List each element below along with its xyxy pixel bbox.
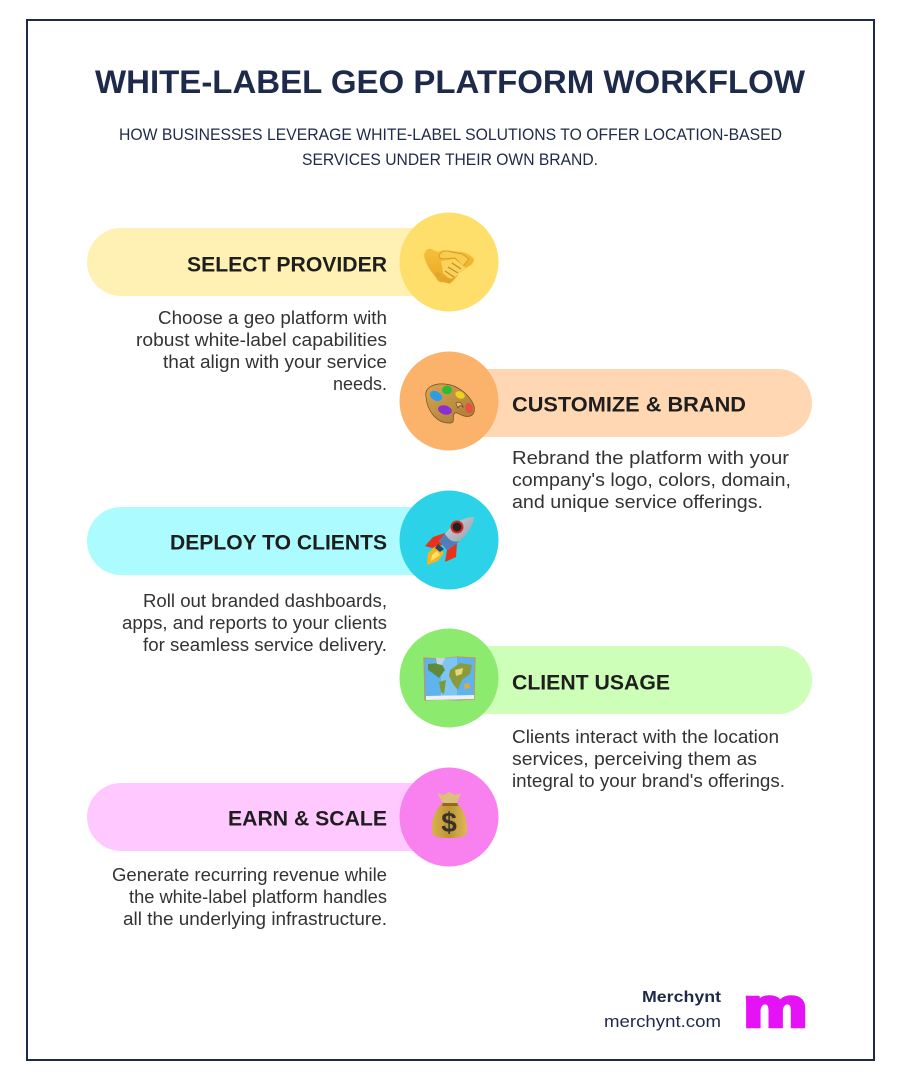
- icon: world map: [424, 657, 475, 700]
- text: earn and scale: [112, 864, 387, 929]
- logo: m: [743, 976, 807, 1038]
- panel: select provider: [87, 212, 498, 394]
- text: earn and scale: all the underlying infrastructure.: [123, 908, 387, 929]
- panel: earn and scale: [87, 768, 498, 929]
- footer: website: merchynt.com: [604, 1013, 721, 1031]
- text: select provider: robust white-label capabilities: [136, 329, 387, 350]
- dollar sign: $: [441, 807, 457, 838]
- text: earn and scale: the white-label platform handles: [129, 886, 387, 907]
- text: customize and brand: and unique service offerings.: [512, 491, 763, 512]
- text: select provider: [136, 307, 387, 394]
- text: select provider: that align with your service: [163, 351, 387, 372]
- circle: select provider: [400, 212, 498, 312]
- text: select provider: needs.: [333, 373, 387, 394]
- panel: customize and brand: [400, 352, 812, 512]
- panel: client usage: [400, 628, 812, 791]
- icon: palette: [426, 384, 474, 423]
- text: client usage: Clients interact with the location: [512, 726, 779, 747]
- text: customize and brand: Rebrand the platform with your: [512, 447, 789, 468]
- heading: client usage: CLIENT USAGE: [512, 671, 670, 695]
- heading: customize and brand: CUSTOMIZE & BRAND: [512, 393, 746, 417]
- subtitle: [119, 126, 782, 169]
- pill: select provider: [87, 228, 467, 296]
- text: earn and scale: Generate recurring revenue while: [112, 864, 387, 885]
- icon: rocket: [425, 517, 474, 565]
- icon: handshake: [424, 249, 474, 284]
- text: deploy to clients: apps, and reports to your clients: [122, 612, 387, 633]
- text: deploy to clients: Roll out branded dashboards,: [143, 590, 387, 611]
- circle: deploy to clients: [400, 490, 498, 590]
- text: customize and brand: [512, 447, 791, 512]
- circle: client usage: [400, 628, 498, 728]
- heading: deploy to clients: DEPLOY TO CLIENTS: [170, 531, 387, 555]
- footer: brand name: Merchynt: [642, 989, 721, 1006]
- subtitle: SERVICES UNDER THEIR OWN BRAND.: [302, 151, 598, 169]
- heading: earn and scale: EARN & SCALE: [228, 807, 387, 831]
- pill: customize and brand: [432, 369, 812, 437]
- text: deploy to clients: [122, 590, 387, 655]
- text: client usage: services, perceiving them as: [512, 748, 757, 769]
- text: select provider: Choose a geo platform with: [158, 307, 387, 328]
- pill: earn and scale: [87, 783, 467, 851]
- subtitle: HOW BUSINESSES LEVERAGE WHITE-LABEL SOLUTIONS TO OFFER LOCATION-BASED: [119, 126, 782, 144]
- pill: deploy to clients: [87, 507, 467, 575]
- circle: earn and scale: [400, 768, 498, 866]
- pill: client usage: [432, 646, 812, 714]
- text: customize and brand: company's logo, colors, domain,: [512, 469, 791, 490]
- icon: money bag: [432, 792, 467, 838]
- panel: deploy to clients: [87, 490, 498, 655]
- text: deploy to clients: for seamless service delivery.: [143, 634, 387, 655]
- circle: customize and brand: [400, 352, 498, 450]
- title: WHITE-LABEL GEO PLATFORM WORKFLOW: [95, 64, 806, 100]
- text: client usage: [512, 726, 785, 791]
- heading: select provider: SELECT PROVIDER: [187, 253, 387, 277]
- text: client usage: integral to your brand's offerings.: [512, 770, 785, 791]
